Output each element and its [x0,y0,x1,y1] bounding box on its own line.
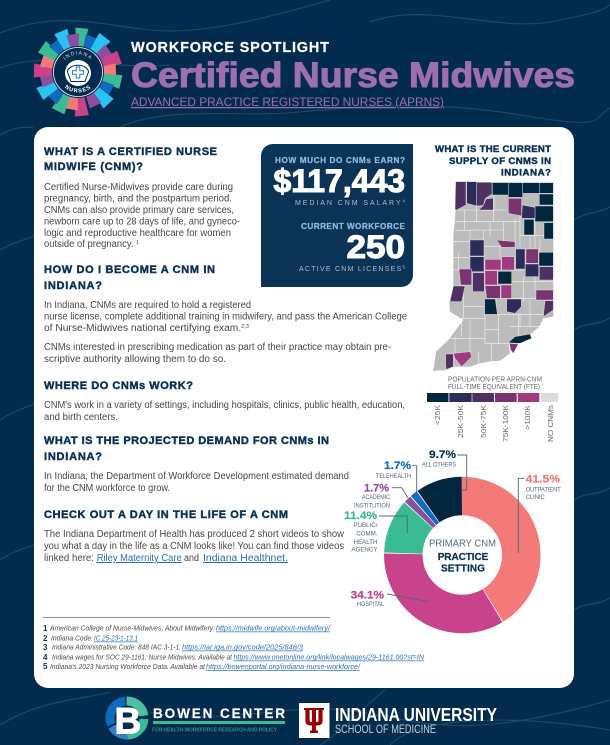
heading: current supply: INDIANA? [501,168,551,178]
text block: becoming a CNM: 2,3 [241,324,249,330]
donut centre label: SETTING [441,564,485,575]
text block: videos with links: linked here: [44,553,94,564]
footnotes: American College of Nurse-Midwives, About Midwifery: [49,626,215,632]
text block: becoming a CNM [44,300,407,365]
logo: Indiana Nurses badge: NURSES [64,84,90,92]
text block: videos with links: you what a day in the life as a CNM looks like! You can find those videos [44,541,344,552]
callout: outpatient clinic 41.5%: OUTPATIENT [526,487,561,494]
legend: map scale: <25K [433,405,442,425]
map: Indiana counties by population per APRN-CNM [433,182,553,371]
callout: public community health agency 11.4%: COMM. [356,531,378,538]
callout: public community health agency 11.4%: PUBLIC/ [353,522,378,529]
callout: all others 9.7% [422,449,467,490]
text block: work settings: CNM's work in a variety of settings, including hospitals, clinics, public health, education, [44,400,405,411]
panel: salary and workforce stats: 250 [346,229,405,265]
legend: map scale: 50K-75K [479,405,488,438]
logo: Bowen Center: FOR HEALTH WORKFORCE RESEARCH AND POLICY [152,728,277,734]
logo: Bowen Center: B [114,700,141,742]
footnotes: Indiana Administrative Code: 848 IAC 3-1-1, [52,644,181,652]
panel: main white card [34,127,574,688]
logo: Bowen Center [110,700,285,742]
logo: Indiana Nurses badge [34,28,122,116]
callout: telehealth 1.7%: 1.7% [384,460,411,472]
text block: videos with links: The Indiana Department of Health has produced 2 short videos to show [44,529,345,540]
header: workforce spotlight: WORKFORCE SPOTLIGHT [131,40,329,56]
text block: demand: for the CNM workforce to grow. [44,483,170,494]
text block: videos with links: Indiana Healthnet. [203,553,288,564]
callout: academic institution 1.7%: ACADEMIC [362,494,390,501]
title: Certified Nurse Midwives [131,56,575,95]
callout: public community health agency 11.4%: 11.4% [344,510,377,522]
callout: public community health agency 11.4% [344,510,407,554]
logo: Bowen Center: BOWEN CENTER [153,706,285,721]
heading: how do I become a CNM [44,264,215,292]
footnotes: IC 25-23-1-13.1 [94,636,138,642]
heading: what is a CNM [44,146,217,173]
text block: becoming a CNM: nurse license, complete additional training in midwifery, and pass the American College [44,312,407,322]
callout: all others 9.7%: ALL OTHERS [422,462,456,469]
legend: map scale [427,374,558,442]
callout: telehealth 1.7% [376,460,417,493]
text block: becoming a CNM: In Indiana, CNMs are required to hold a registered [44,300,251,311]
legend: map scale: FULL-TIME EQUIVALENT (FTE) [448,382,540,391]
callout: hospital 34.1% [351,589,429,608]
footnotes: https://www.onetonline.org/link/localwages/29-1161.00?st=IN [234,654,425,662]
text block: CNM definition: newborn care up to 28 days of life, and gyneco- [44,216,240,228]
heading: current supply [435,144,551,178]
logo: Indiana University School of Medicine: INDIANA UNIVERSITY [335,705,497,725]
text block: CNM definition: Certified Nurse-Midwives provide care during [44,182,233,193]
donut centre label [429,539,496,575]
callout: public community health agency 11.4%: HEALTH [354,539,378,546]
heading: what is a CNM: MIDWIFE (CNM)? [44,161,143,173]
panel: salary and workforce stats: 5 [402,264,405,270]
donut centre label: PRIMARY CNM [429,539,496,550]
text block: CNM definition: logic and reproductive healthcare for women [44,228,231,239]
callout: all others 9.7%: 9.7% [429,449,456,461]
text block: videos with links: and [184,553,199,564]
panel: salary and workforce stats: MEDIAN CNM SALARY [295,200,401,207]
text block: CNM definition: 1 [136,240,139,246]
text block: becoming a CNM: of Nurse-Midwives national certifying exam. [44,323,237,334]
heading: projected demand: WHAT IS THE PROJECTED DEMAND FOR CNMs IN [44,435,329,447]
panel: salary and workforce stats [261,144,413,287]
logo: Indiana University School of Medicine: SCHOOL OF MEDICINE [335,722,436,736]
legend: map scale: POPULATION PER APRN-CNM [448,374,542,384]
heading: current supply: WHAT IS THE CURRENT [435,144,551,155]
donut centre label: PRACTICE [438,552,489,563]
logo: Indiana Nurses badge: INDIANA [63,51,92,60]
footnotes: https://iar.iga.in.gov/code/2025/848/3 [182,644,303,652]
callout: outpatient clinic 41.5%: CLINIC [526,494,545,501]
heading: day in the life: CHECK OUT A DAY IN THE LIFE OF A CNM [44,509,288,521]
logo: Indiana University School of Medicine [299,703,497,738]
callout: outpatient clinic 41.5% [518,473,561,553]
text block: demand: In Indiana, the Department of Workforce Development estimated demand [44,471,349,482]
text block: CNM definition: outside of pregnancy. [44,239,139,250]
footnotes: Indiana wages for SOC 29-1161: Nurse Midwives. Available at [52,654,233,662]
footnotes: Indiana's 2023 Nursing Workforce Data. Available at [50,664,206,671]
donut chart: primary CNM practice setting [403,496,521,614]
footnotes: 5 [43,662,48,671]
callout: academic institution 1.7%: INSTITUTION [354,503,390,510]
footnotes: Indiana Code: [51,636,93,642]
panel: salary and workforce stats: CURRENT WORKFORCE [301,222,406,231]
heading: projected demand: INDIANA? [44,451,102,463]
text block: work settings [44,400,405,423]
callout: hospital 34.1%: HOSPITAL [357,601,384,608]
footnotes: https://midwife.org/about-midwifery/ [216,626,331,632]
callout: outpatient clinic 41.5%: 41.5% [526,473,560,485]
heading: how do I become a CNM: HOW DO I BECOME A CNM IN [44,264,215,276]
callout: academic institution 1.7% [354,483,408,510]
heading: what is a CNM: WHAT IS A CERTIFIED NURSE [44,146,217,158]
panel: salary and workforce stats: HOW MUCH DO CNMs EARN? [275,156,405,165]
footnotes: 3 [43,643,48,652]
callout: academic institution 1.7%: 1.7% [364,483,389,495]
heading: how do I become a CNM: INDIANA? [44,280,102,292]
panel: salary and workforce stats: ACTIVE CNM LICENSES [299,266,401,273]
callout: telehealth 1.7%: TELEHEALTH [376,473,411,480]
text block: becoming a CNM: CNMs interested in prescribing medication as part of their practice may obtain pre- [44,342,391,353]
heading: projected demand [44,435,329,463]
text block: CNM definition [44,182,240,250]
footnotes: 4 [43,653,48,662]
panel: salary and workforce stats: $117,443 [274,163,405,199]
text block: becoming a CNM: scriptive authority allowing them to do so. [44,354,226,365]
legend: map scale: 25K-50K [456,405,465,438]
footnotes: 2 [43,634,48,643]
text block: work settings: and birth centers. [44,412,118,423]
footnotes [43,617,425,671]
callout: hospital 34.1%: 34.1% [351,589,384,601]
text block: videos with links [44,529,345,564]
panel: salary and workforce stats: 4 [402,198,405,204]
subtitle: ADVANCED PRACTICE REGISTERED NURSES (APRNS) [131,95,444,109]
callout: public community health agency 11.4%: AGENCY [351,546,378,554]
footnotes: https://bowenportal.org/indiana-nurse-workforce/ [206,664,361,671]
legend: map scale: >100K [523,405,532,430]
footnotes: 1 [43,624,48,633]
heading: current supply: SUPPLY OF CNMS IN [449,156,551,167]
text block: CNM definition: pregnancy, birth, and the postpartum period. [44,194,232,204]
legend: map scale: NO CNMs [546,405,555,442]
text block: CNM definition: CNMs can also provide primary care services, [44,205,234,216]
heading: where do CNMs work: WHERE DO CNMs WORK? [44,380,193,392]
legend: map scale: 75K-100K [501,405,510,442]
text block: demand [44,471,349,494]
text block: videos with links: Riley Maternity Care [97,553,182,564]
